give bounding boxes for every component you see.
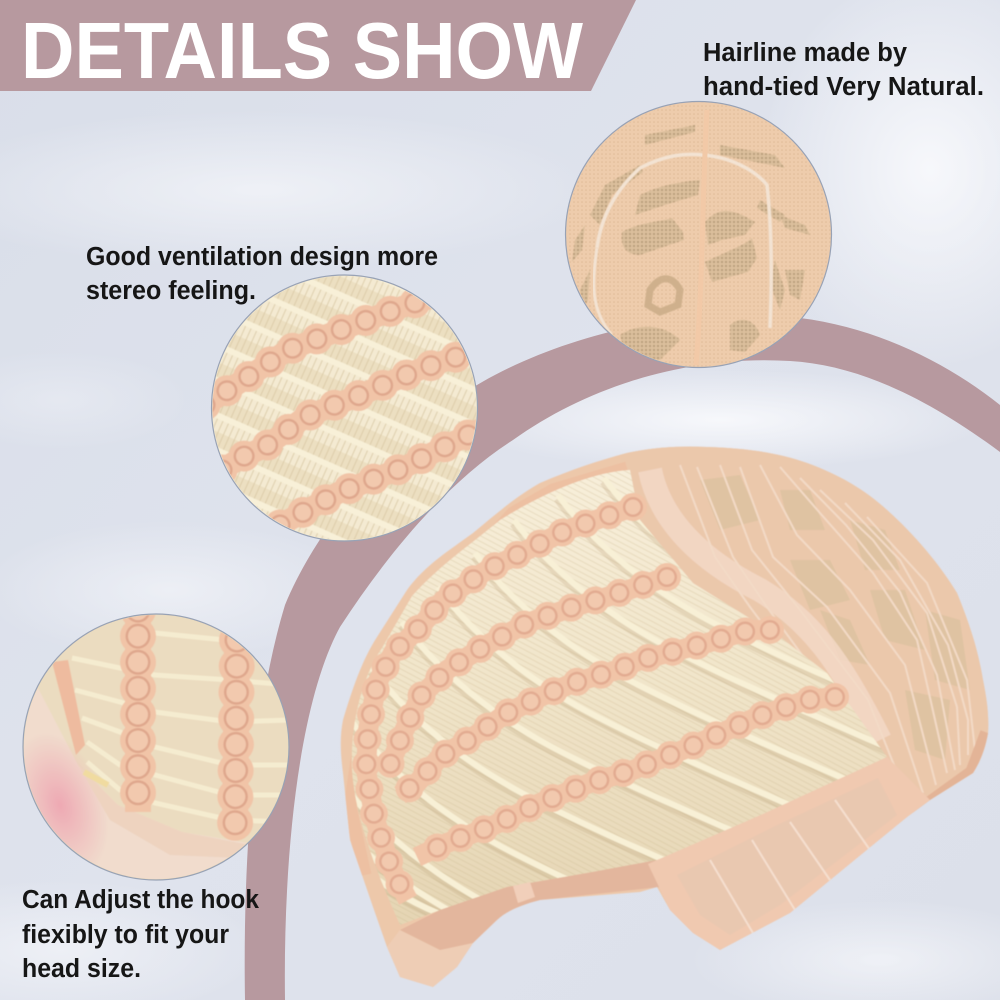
- lace side of cap: [638, 464, 988, 800]
- hook clip: [513, 882, 535, 903]
- detail circle: ventilation: [205, 270, 490, 545]
- title banner: [0, 0, 636, 95]
- caption: ventilation: Good ventilation design more: [86, 243, 438, 271]
- caption: hook: fiexibly to fit your: [22, 921, 229, 949]
- wig cap: [339, 440, 1000, 1000]
- lace elastic bands: [366, 507, 835, 900]
- ear tab: [648, 763, 930, 933]
- caption: hook: Can Adjust the hook: [22, 886, 260, 914]
- caption: hairline: Hairline made by: [703, 39, 908, 67]
- lower tip: [388, 930, 471, 986]
- caption: hook: head size.: [22, 955, 141, 983]
- detail circle: hairline lace: [565, 100, 833, 370]
- caption: ventilation: [86, 243, 438, 305]
- caption: ventilation: stereo feeling.: [86, 277, 256, 305]
- caption: hairline: [703, 39, 984, 101]
- detail circle: hook: [22, 613, 290, 881]
- caption: hairline: hand-tied Very Natural.: [703, 73, 984, 101]
- hair wefts: [352, 470, 886, 924]
- caption: hook: [22, 886, 260, 983]
- bottom elastic edge: [400, 860, 660, 958]
- title: DETAILS SHOW: [21, 6, 583, 95]
- arc: mauve ring behind cap: [245, 315, 1000, 1000]
- outer band: [350, 468, 627, 875]
